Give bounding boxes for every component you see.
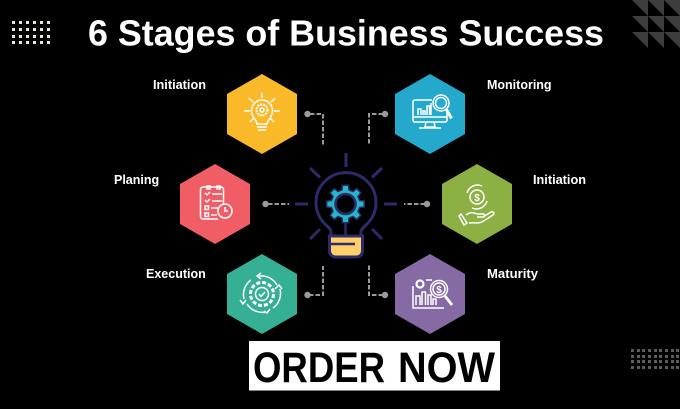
connector: yellow to bulb bbox=[304, 111, 323, 145]
label: Planing: Planing bbox=[114, 173, 159, 187]
hexagon: blue monitoring bbox=[395, 74, 465, 154]
connector: purple to bulb bbox=[369, 265, 388, 298]
label: Initiation left: Initiation bbox=[153, 78, 206, 92]
connector: red to bulb bbox=[262, 201, 289, 207]
decoration: triangle grid top right bbox=[632, 0, 680, 48]
button: order now: ORDER bbox=[253, 344, 385, 392]
hexagon: yellow initiation bbox=[227, 74, 297, 154]
gear bbox=[327, 185, 364, 223]
label: Initiation right: Initiation bbox=[533, 173, 586, 187]
label: Execution: Execution bbox=[146, 267, 206, 281]
decoration: dot grid top left bbox=[12, 21, 50, 44]
icon: checklist with clock bbox=[200, 186, 232, 219]
gear hole bbox=[336, 194, 356, 214]
title: 6 Stages of Business Success bbox=[88, 12, 604, 54]
hexagon: green initiation bbox=[442, 164, 512, 244]
bulb outline bbox=[316, 173, 376, 238]
decoration: dot grid bottom right bbox=[631, 349, 679, 369]
connector: teal to bulb bbox=[304, 266, 323, 298]
connector: blue to bulb bbox=[369, 111, 388, 145]
bulb rays bbox=[295, 153, 397, 239]
icon: gear with check and cycle arrows bbox=[240, 273, 282, 313]
button: order now bbox=[249, 341, 500, 392]
button: order now: NOW bbox=[398, 344, 495, 392]
label: Monitoring: Monitoring bbox=[487, 78, 552, 92]
central icon: light bulb with gear bbox=[295, 153, 397, 257]
connector: green to bulb bbox=[404, 201, 430, 207]
label: Maturity: Maturity bbox=[487, 267, 538, 281]
icon: hand holding dollar coin: $ bbox=[474, 193, 480, 204]
hexagon: teal execution bbox=[227, 254, 297, 334]
icon: chart with gear and dollar magnifier: $ bbox=[436, 285, 442, 296]
hexagon: red planning bbox=[180, 164, 250, 244]
hexagon: purple maturity bbox=[395, 254, 465, 334]
icon: light bulb with gear bbox=[244, 93, 280, 130]
icon: monitor with magnifier bbox=[413, 95, 452, 128]
bulb base bbox=[330, 236, 362, 257]
